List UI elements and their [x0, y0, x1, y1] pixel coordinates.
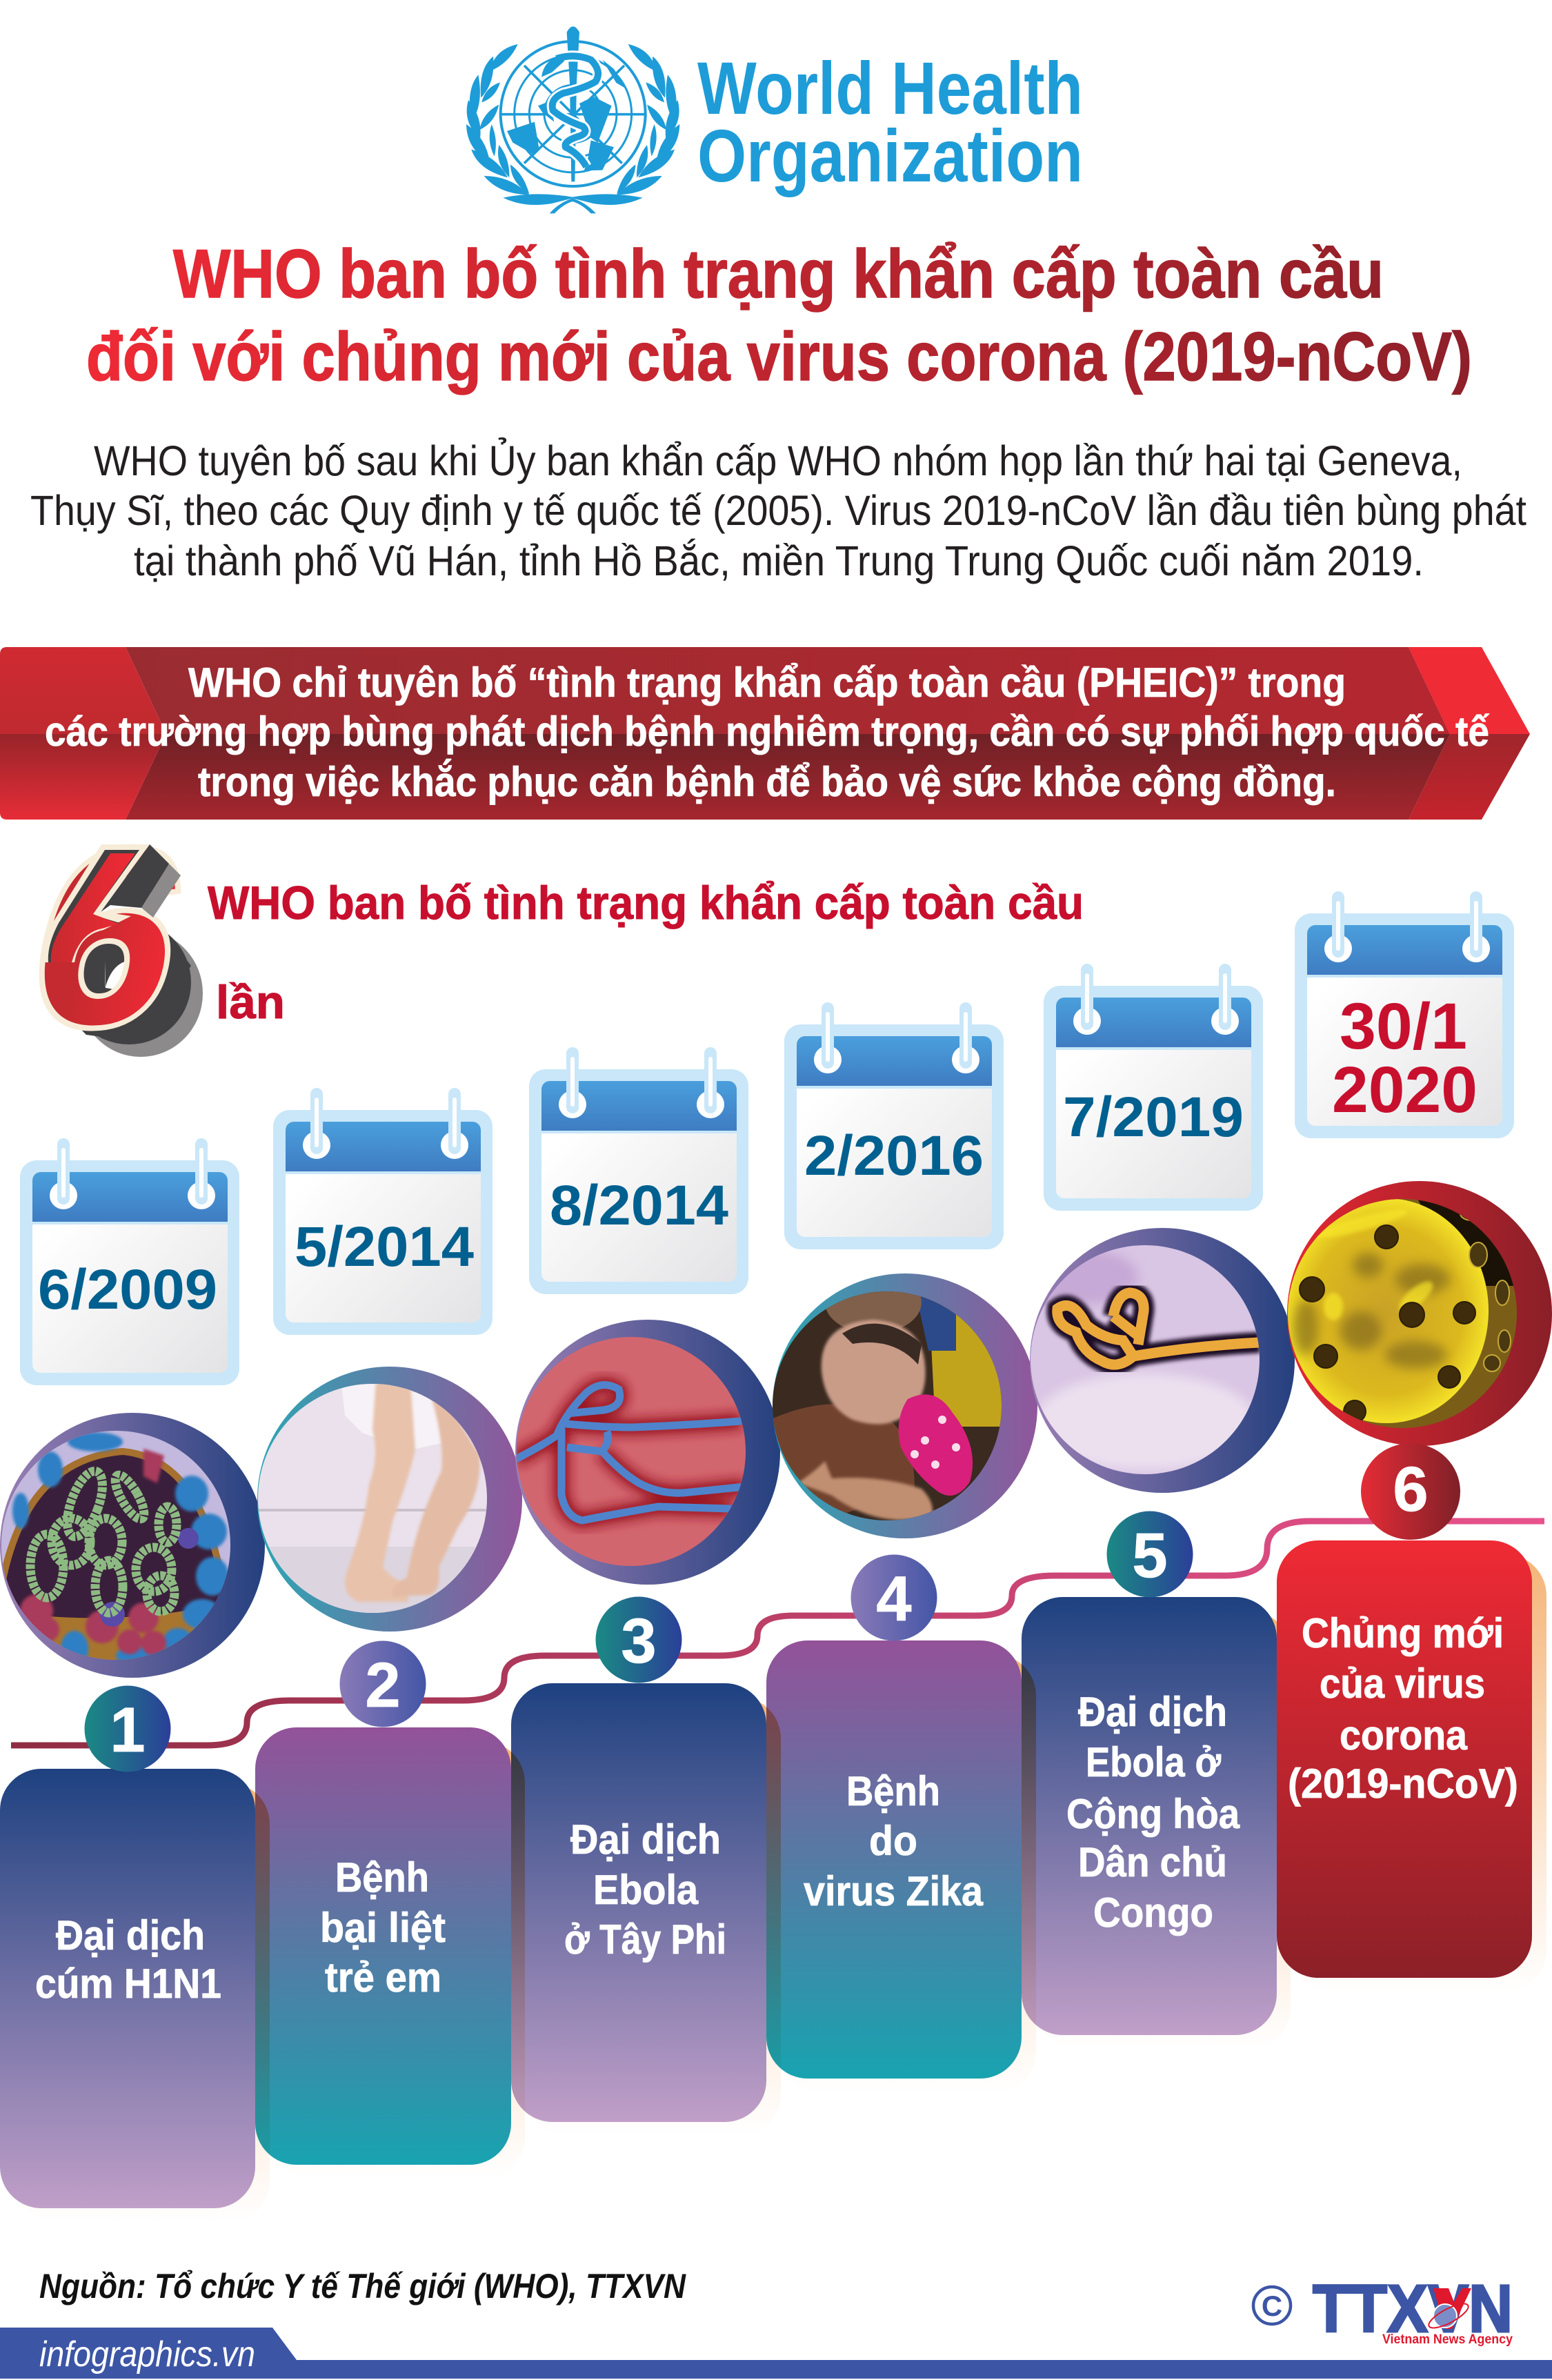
number badge 5: 5 — [1132, 1520, 1168, 1591]
card 3: ebola west africa: ở Tây Phi — [564, 1916, 726, 1963]
card 5: ebola congo: Cộng hòa — [1066, 1791, 1240, 1837]
logo wordmark: Organization — [697, 114, 1083, 197]
TTXVN logo: Vietnam News Agency — [1382, 2332, 1513, 2347]
number badge 3: 3 — [621, 1606, 657, 1676]
card 4: zika: do — [869, 1818, 917, 1864]
card 6: novel coronavirus: Chủng mới — [1302, 1610, 1504, 1656]
number badge 1: 1 — [110, 1695, 146, 1765]
number badge 5 — [1106, 1511, 1193, 1598]
card 5: ebola congo: Đại dịch — [1078, 1689, 1227, 1735]
card 4: zika: Bệnh — [846, 1768, 940, 1814]
number badge 1 — [84, 1686, 171, 1772]
photo circle 3: ebola virus — [514, 1320, 780, 1585]
number badge 4 — [851, 1555, 937, 1640]
calendar: 2/2016: 2/2016 — [804, 1124, 984, 1187]
photo circle 5: ebola orange — [1028, 1228, 1295, 1493]
timeline line — [11, 1521, 1544, 1745]
calendar: 30/1 2020 — [1295, 891, 1514, 1138]
calendar: 30/1 2020: 2020 — [1332, 1053, 1478, 1127]
banner: PHEIC definition: trong việc khắc phục căn bệnh để bảo vệ sức khỏe cộng đồng. — [198, 759, 1336, 805]
card 5: ebola congo: Ebola ở — [1086, 1739, 1221, 1785]
WHO logo — [466, 26, 1083, 213]
card 5: ebola congo — [1022, 1597, 1291, 2049]
heading: six times: lần — [216, 976, 285, 1029]
card 1: H1N1: cúm H1N1 — [35, 1961, 221, 2007]
big number 6: 6 — [11, 799, 208, 1076]
number badge 6: 6 — [1393, 1454, 1429, 1525]
card 6: novel coronavirus: (2019-nCoV) — [1288, 1761, 1518, 1807]
card 3: ebola west africa: Ebola — [593, 1867, 699, 1913]
card 5: ebola congo: Congo — [1093, 1890, 1213, 1936]
card 1: H1N1: Đại dịch — [56, 1912, 205, 1958]
photo circle 1: influenza virus — [0, 1413, 265, 1678]
number badge 4: 4 — [876, 1564, 912, 1634]
photo circle 6: novel coronavirus — [1284, 1181, 1552, 1446]
calendar: 7/2019: 7/2019 — [1063, 1086, 1244, 1149]
photo circle 4: zika baby — [770, 1271, 1037, 1538]
card 3: ebola west africa: Đại dịch — [570, 1816, 721, 1863]
calendar: 6/2009 — [20, 1138, 239, 1385]
footer bar — [0, 2328, 1552, 2379]
title: WHO ban bố tình trạng khẩn cấp toàn cầu — [173, 235, 1384, 312]
source note: Nguồn: Tổ chức Y tế Thế giới (WHO), TTXVN — [39, 2267, 686, 2305]
calendar: 5/2014 — [273, 1088, 493, 1335]
calendar: 8/2014 — [529, 1047, 748, 1294]
calendar: 6/2009: 6/2009 — [38, 1258, 217, 1321]
calendar: 5/2014: 5/2014 — [295, 1216, 474, 1278]
logo wordmark: World Health — [697, 46, 1083, 130]
number badge 3 — [596, 1596, 682, 1683]
number badge 2: 2 — [365, 1650, 401, 1720]
card 6: novel coronavirus — [1277, 1540, 1546, 1992]
copyright mark: C — [1262, 2290, 1282, 2322]
intro paragraph — [30, 437, 1526, 584]
banner: PHEIC definition — [0, 647, 1530, 820]
intro paragraph: WHO tuyên bố sau khi Ủy ban khẩn cấp WHO nhóm họp lần thứ hai tại Geneva, — [94, 437, 1462, 484]
card 5: ebola congo: Dân chủ — [1078, 1839, 1227, 1885]
footer bar: infographics.vn — [39, 2334, 255, 2374]
banner: PHEIC definition: WHO chỉ tuyên bố “tình trạng khẩn cấp toàn cầu (PHEIC)” trong — [188, 660, 1346, 706]
card 3: ebola west africa — [511, 1683, 781, 2136]
heading: six times: WHO ban bố tình trạng khẩn cấp toàn cầu — [208, 877, 1084, 929]
card 4: zika: virus Zika — [804, 1868, 984, 1914]
card 6: novel coronavirus: của virus — [1320, 1660, 1485, 1707]
photo circle 2: polio legs — [255, 1367, 522, 1632]
number badge 2 — [339, 1640, 426, 1727]
calendar: 2/2016 — [784, 1002, 1004, 1249]
card 2: polio: trẻ em — [325, 1954, 441, 2001]
copyright mark — [1253, 2287, 1291, 2324]
calendar: 8/2014: 8/2014 — [550, 1174, 728, 1237]
icon: WHO emblem — [466, 26, 679, 213]
card 1: H1N1 — [0, 1769, 270, 2222]
card 2: polio: bại liệt — [320, 1905, 446, 1951]
calendar: 7/2019 — [1044, 964, 1263, 1211]
title — [86, 235, 1472, 395]
heading: six times — [208, 877, 1084, 1029]
number badge 6 — [1361, 1443, 1460, 1540]
intro paragraph: tại thành phố Vũ Hán, tỉnh Hồ Bắc, miền Trung Trung Quốc cuối năm 2019. — [134, 537, 1424, 584]
card 6: novel coronavirus: corona — [1340, 1712, 1468, 1758]
TTXVN logo: TTXVN — [1313, 2271, 1513, 2346]
logo wordmark — [697, 46, 1083, 197]
card 4: zika — [766, 1640, 1036, 2092]
card 2: polio: Bệnh — [335, 1854, 429, 1901]
calendar: 30/1 2020: 30/1 — [1340, 990, 1467, 1063]
card 2: polio — [255, 1727, 525, 2179]
